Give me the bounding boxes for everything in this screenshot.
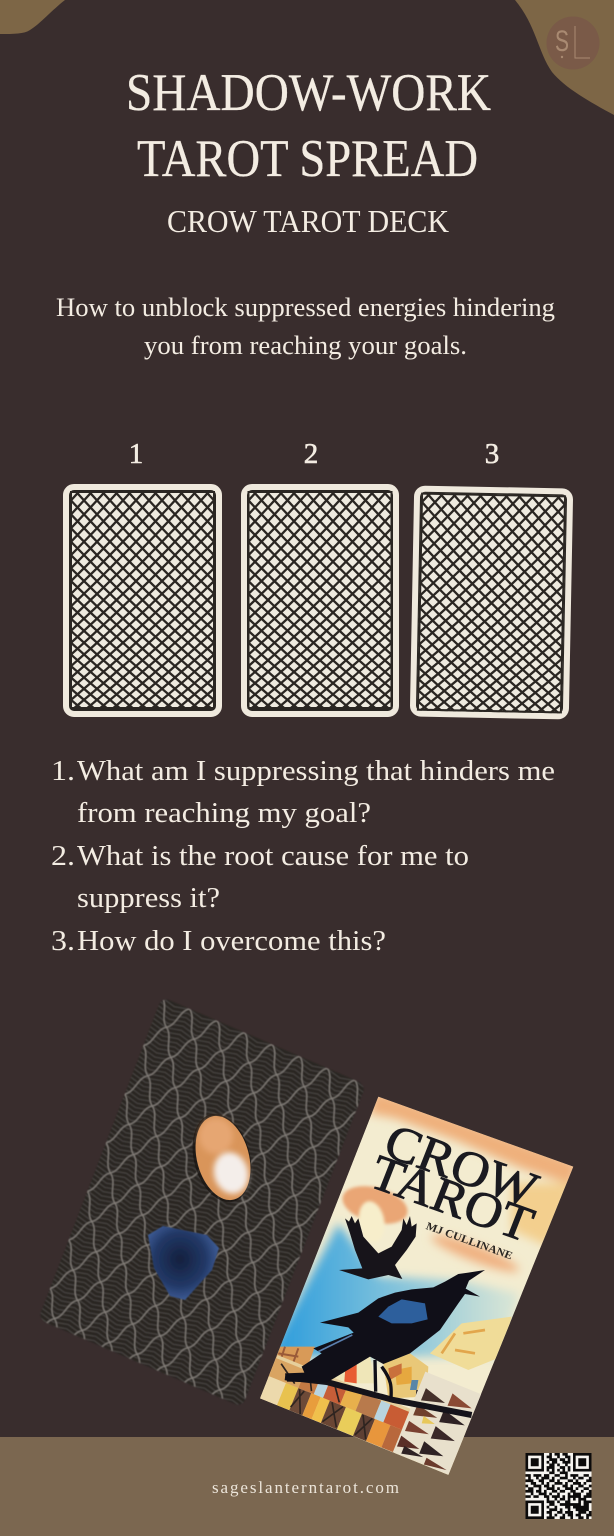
question 2: What is the root cause for me to [77,840,469,872]
question 2 [51,840,469,914]
intro text [56,293,555,360]
book title text [358,1112,554,1265]
small flying crow [339,1216,417,1279]
card 3 [179,482,614,724]
question 1: 1. [51,755,75,787]
title [126,64,491,188]
question 2: suppress it? [77,882,220,914]
blue stone [148,1226,219,1300]
corner shape: top right [515,0,614,115]
question 1 [51,755,555,829]
mosaic left of crow [267,1346,315,1380]
title: TAROT SPREAD [137,130,478,188]
question 3: 3. [51,925,75,957]
intro text: How to unblock suppressed energies hindering [56,293,555,322]
telephone wire [285,1377,472,1415]
website url: sageslanterntarot.com [212,1478,399,1497]
logo: SL monogram: S [555,25,569,58]
mosaic centre [328,1353,428,1398]
logo: SL monogram [546,16,600,70]
question 1: What am I suppressing that hinders me [77,755,555,787]
corner shape: top left [0,0,65,34]
question 2: 2. [51,840,75,872]
card number 3: 3 [485,438,499,470]
card number 1: 1 [129,438,143,470]
book cover base [260,1097,573,1475]
question 1: from reaching my goal? [77,797,371,829]
question list [51,755,555,957]
book title text: MJ CULLINANE [424,1220,514,1262]
large crow [285,1270,485,1398]
card 1 [0,485,453,715]
patterned ground [260,1355,482,1474]
QR code [526,1453,592,1519]
title: SHADOW-WORK [126,64,491,122]
book title text: CROW [377,1113,546,1218]
book title text: TAROT [363,1144,542,1253]
intro text: you from reaching your goals. [144,331,467,360]
deck back [38,997,366,1407]
footer band [0,1437,614,1536]
photo: card deck back with stones [38,997,366,1407]
sun [340,1184,410,1226]
orange stone [183,1107,261,1209]
photo: Crow Tarot book [260,1090,578,1479]
painted sky [268,1090,578,1357]
pale yellow hills [430,1317,512,1370]
question 3: How do I overcome this? [77,925,386,957]
card number 2: 2 [304,438,318,470]
subtitle: deck name: CROW TAROT DECK [167,203,449,239]
card 2 [10,485,614,715]
